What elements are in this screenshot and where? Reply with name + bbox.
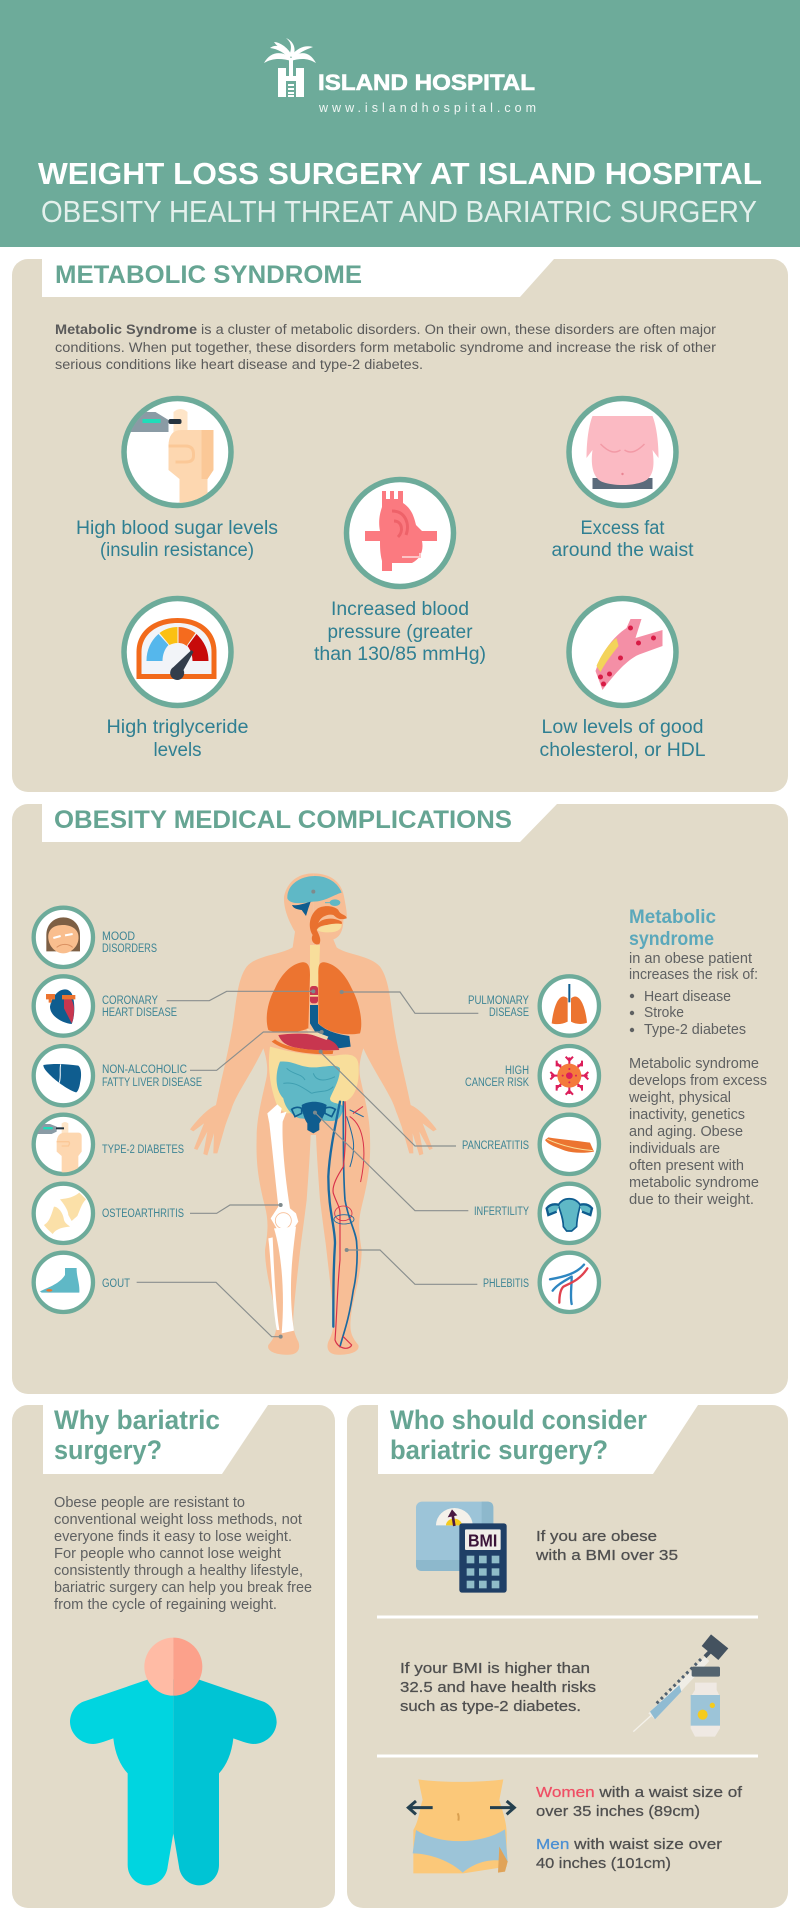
left labels: MOOD [102, 931, 135, 943]
brain [287, 876, 342, 903]
icon: veins [540, 1253, 599, 1312]
trachea [310, 945, 320, 993]
side note paragraph: metabolic syndrome [629, 1175, 759, 1191]
text: waist sizes: Men with waist size over [536, 1836, 722, 1853]
right labels: PHLEBITIS [483, 1278, 529, 1290]
panel: who should consider [347, 1405, 788, 1908]
heading tab: obesity complications [42, 804, 557, 842]
heading tab: who should consider [378, 1405, 698, 1474]
icon: gauge [124, 598, 231, 706]
label: high blood sugar: (insulin resistance) [100, 540, 254, 561]
heading tab: why bariatric: surgery? [54, 1435, 162, 1465]
label: increased blood pressure [314, 599, 486, 665]
heading tab: who should consider: bariatric surgery? [390, 1435, 608, 1465]
left labels [102, 931, 202, 1290]
icon: finger blood test [122, 398, 231, 506]
panel: why bariatric surgery [12, 1405, 335, 1908]
leg bones [267, 1104, 298, 1230]
label: high blood sugar: High blood sugar levels [76, 518, 278, 539]
side note heading: Metabolic [629, 906, 716, 928]
icon: uterus [540, 1184, 599, 1243]
icon: mood face [34, 908, 93, 967]
side note paragraph: weight, physical [628, 1090, 731, 1106]
icon: scale and bmi calculator [416, 1502, 507, 1593]
icon: waist with arrows [408, 1779, 514, 1873]
body text: Obese people are resistant to [54, 1495, 245, 1511]
icon: pancreas [540, 1115, 599, 1174]
label: increased blood pressure: Increased blood [331, 599, 469, 620]
body text: consistently through a healthy lifestyle, [54, 1563, 303, 1579]
title: WEIGHT LOSS SURGERY AT ISLAND HOSPITAL [38, 156, 762, 191]
heart and vessels [310, 986, 318, 1003]
label: increased blood pressure: pressure (greater [328, 622, 473, 643]
leader lines [137, 890, 478, 1339]
heading tab: metabolic syndrome: METABOLIC SYNDROME [55, 261, 362, 289]
side note heading [629, 906, 716, 950]
label: increased blood pressure: than 130/85 mmHg) [314, 644, 486, 665]
side note paragraph: individuals are [629, 1141, 720, 1157]
uterus [302, 1102, 327, 1133]
intro paragraph: Metabolic Syndrome is a cluster of metabolic disorders. On their own, these disorders are often major [55, 322, 717, 337]
text: bmi over 32.5: such as type-2 diabetes. [400, 1698, 581, 1715]
leg veins [328, 1102, 364, 1348]
right labels: CANCER RISK [465, 1077, 529, 1089]
text: waist sizes: Women with a waist size of [536, 1784, 743, 1801]
label: high triglyceride [106, 717, 248, 761]
icon: heart [346, 480, 454, 586]
text: bmi over 35: with a BMI over 35 [535, 1547, 678, 1564]
side note paragraph [628, 1056, 767, 1208]
bullet list: Heart disease [644, 989, 731, 1005]
bullet list: Type-2 diabetes [644, 1022, 746, 1038]
panel: obesity medical complications [12, 804, 788, 1394]
lungs [267, 962, 310, 1033]
text: bmi over 32.5 [400, 1660, 596, 1715]
small intestine [277, 1061, 343, 1121]
side note: metabolic syndrome risks: increases the risk of: [629, 967, 758, 983]
side note paragraph: inactivity, genetics [629, 1107, 745, 1123]
icon: cancer cell [540, 1046, 599, 1105]
left labels: CORONARY [102, 995, 158, 1007]
intro paragraph: conditions. When put together, these disorders form metabolic syndrome and increase the risk of other [55, 340, 717, 355]
label: high blood sugar [76, 518, 278, 561]
side note: metabolic syndrome risks: in an obese patient [629, 951, 752, 967]
side note paragraph: and aging. Obese [629, 1124, 743, 1140]
icon: syringe and vial [633, 1634, 728, 1737]
body text [54, 1495, 312, 1613]
icon: finger test [34, 1115, 93, 1174]
text: waist sizes: 40 inches (101cm) [536, 1855, 671, 1872]
icon: lungs [540, 976, 599, 1036]
heading tab: who should consider: Who should consider [390, 1405, 647, 1435]
icon: belly [569, 398, 676, 506]
body text: bariatric surgery can help you break free [54, 1580, 312, 1596]
icon: palm hospital logo [264, 38, 316, 97]
large intestine [269, 1047, 359, 1113]
label: high triglyceride: levels [154, 740, 202, 761]
stomach and pancreas [278, 1034, 339, 1050]
body text: everyone finds it easy to lose weight. [54, 1529, 292, 1545]
item: low hdl [540, 598, 706, 761]
panel: metabolic syndrome [12, 259, 788, 792]
heading tab: obesity complications: OBESITY MEDICAL COMPLICATIONS [54, 806, 512, 834]
icon: joints [34, 1184, 93, 1243]
heading tab: metabolic syndrome [42, 259, 554, 297]
side note paragraph: often present with [629, 1158, 744, 1174]
label: excess fat: Excess fat [580, 518, 665, 539]
heading tab: why bariatric: Why bariatric [54, 1405, 220, 1435]
label: low hdl: Low levels of good [542, 717, 704, 738]
anatomy body figure [190, 873, 437, 1355]
icon: heart [34, 976, 93, 1036]
text: bmi over 35: If you are obese [536, 1528, 657, 1545]
item: increased blood pressure [314, 480, 486, 665]
item: high triglyceride [106, 598, 248, 761]
right labels: HIGH [505, 1065, 529, 1077]
left labels: HEART DISEASE [102, 1007, 177, 1019]
left labels: NON-ALCOHOLIC [102, 1064, 187, 1076]
right labels [462, 995, 529, 1290]
right labels: PANCREATITIS [462, 1140, 529, 1152]
item: excess fat [552, 398, 694, 561]
right icon column [540, 976, 599, 1312]
body text: from the cycle of regaining weight. [54, 1597, 277, 1613]
label: low hdl: cholesterol, or HDL [540, 740, 706, 761]
text: bmi over 35 [535, 1528, 678, 1564]
bmi display text: BMI [468, 1531, 497, 1551]
bullet list [630, 989, 746, 1038]
text: bmi over 32.5: If your BMI is higher than [400, 1660, 590, 1677]
side note heading: syndrome [629, 928, 714, 950]
left labels: DISORDERS [102, 943, 157, 955]
left labels: OSTEOARTHRITIS [102, 1208, 184, 1220]
left icon column [34, 908, 93, 1312]
text: waist sizes: over 35 inches (89cm) [536, 1803, 700, 1820]
header band [0, 0, 800, 247]
intro paragraph: serious conditions like heart disease and type-2 diabetes. [55, 357, 423, 372]
website url: www.islandhospital.com [318, 101, 536, 115]
throat [310, 906, 347, 944]
item: high blood sugar [76, 398, 278, 561]
intro paragraph [55, 322, 717, 372]
body text: conventional weight loss methods, not [54, 1512, 302, 1528]
label: excess fat: around the waist [552, 540, 694, 561]
bullet list: Stroke [644, 1005, 684, 1021]
left labels: GOUT [102, 1278, 130, 1290]
right labels: DISEASE [489, 1007, 529, 1019]
left labels: FATTY LIVER DISEASE [102, 1077, 202, 1089]
side note paragraph: develops from excess [629, 1073, 767, 1089]
body text: For people who cannot lose weight [54, 1546, 281, 1562]
right labels: INFERTILITY [474, 1206, 529, 1218]
right labels: PULMONARY [468, 995, 529, 1007]
icon: artery [569, 598, 676, 706]
label: low hdl [540, 717, 706, 761]
icon: foot [34, 1253, 93, 1312]
heading tab: why bariatric [43, 1405, 268, 1474]
text: waist sizes [536, 1784, 743, 1872]
logo wordmark: ISLAND HOSPITAL [318, 70, 535, 95]
icon: obese figure [70, 1638, 277, 1885]
text: bmi over 32.5: 32.5 and have health risks [400, 1679, 596, 1696]
side note paragraph: Metabolic syndrome [629, 1056, 759, 1072]
label: excess fat [552, 518, 694, 561]
side note paragraph: due to their weight. [629, 1192, 754, 1208]
icon: liver [34, 1046, 93, 1105]
left labels: TYPE-2 DIABETES [102, 1144, 184, 1156]
side note: metabolic syndrome risks [628, 906, 767, 1208]
label: high triglyceride: High triglyceride [106, 717, 248, 738]
